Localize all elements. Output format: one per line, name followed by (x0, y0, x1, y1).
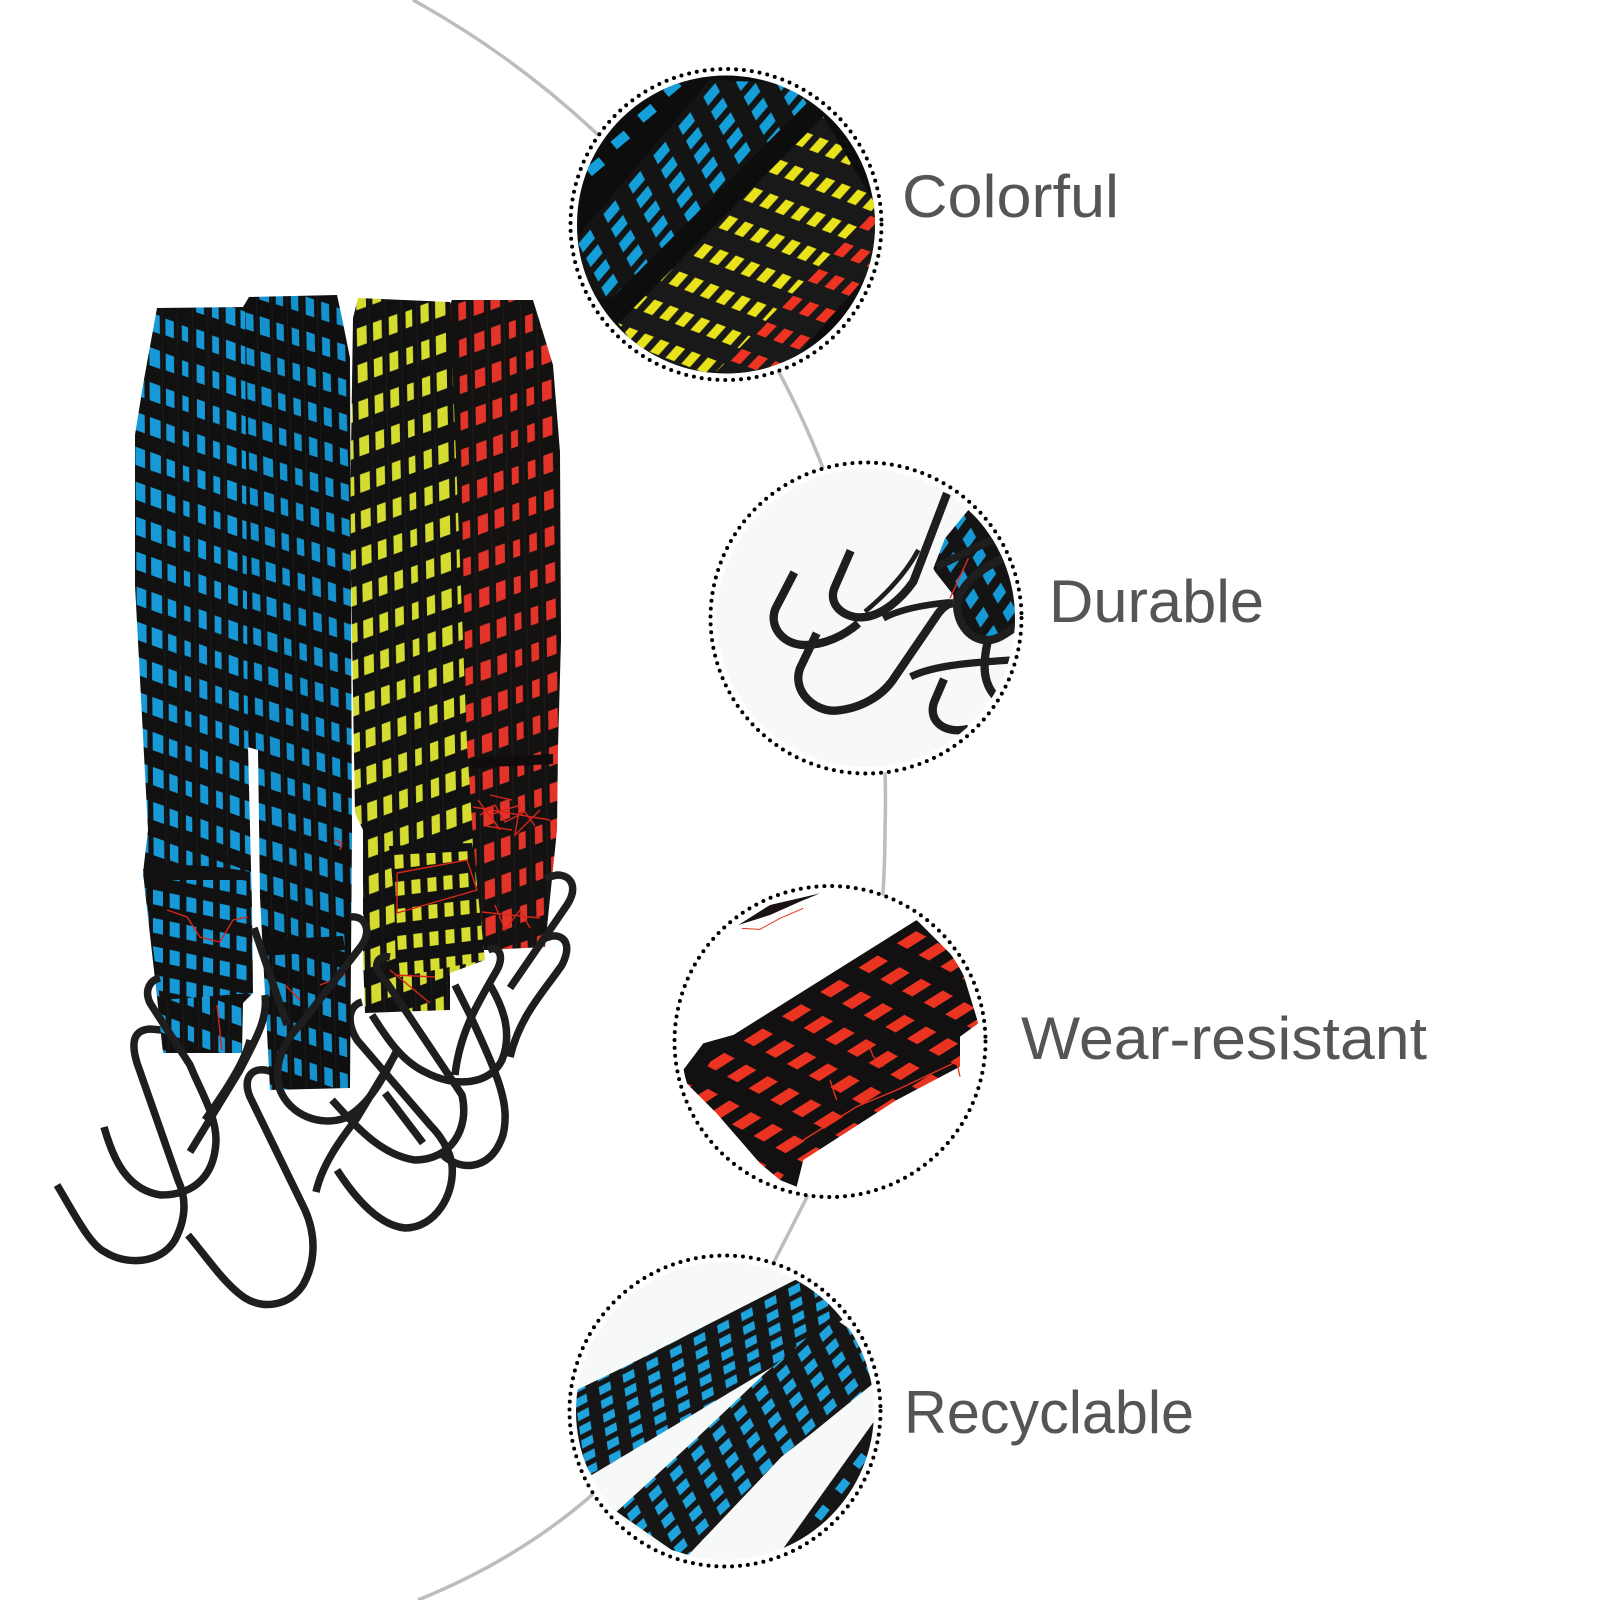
lower right strap (784, 1422, 874, 1548)
callout circle: durable (708, 460, 1024, 776)
upper left strip dashes (585, 80, 682, 176)
callout circle: recyclable (568, 1254, 882, 1568)
label: Recyclable: Recyclable (904, 1379, 1194, 1446)
front hooks (104, 875, 573, 1195)
red strap detail (717, 207, 880, 380)
upper strap (573, 1278, 852, 1475)
hooks (774, 493, 1020, 730)
callout circle: wear-resistant (672, 884, 988, 1199)
label: Wear-resistant: Wear-resistant (1021, 1005, 1427, 1072)
red strap (442, 300, 561, 950)
folded strap end (683, 920, 978, 1187)
connecting arc (413, 0, 885, 1600)
torn sliver (738, 893, 820, 925)
label: Durable: Durable (1049, 568, 1264, 635)
blue strap 1 (135, 307, 253, 1053)
yellow strap (350, 298, 485, 1013)
yellow strap detail (618, 117, 877, 380)
rear hooks (57, 936, 567, 1304)
callout circle: colorful (568, 67, 884, 382)
loose red threads (803, 1040, 960, 1140)
product photo: four bungee straps with hooks (57, 295, 573, 1304)
blue strap detail (573, 80, 807, 300)
blue strap 2 (240, 295, 352, 1090)
label: Colorful: Colorful (902, 163, 1119, 230)
strap end (933, 510, 1015, 636)
middle strap (617, 1317, 885, 1555)
